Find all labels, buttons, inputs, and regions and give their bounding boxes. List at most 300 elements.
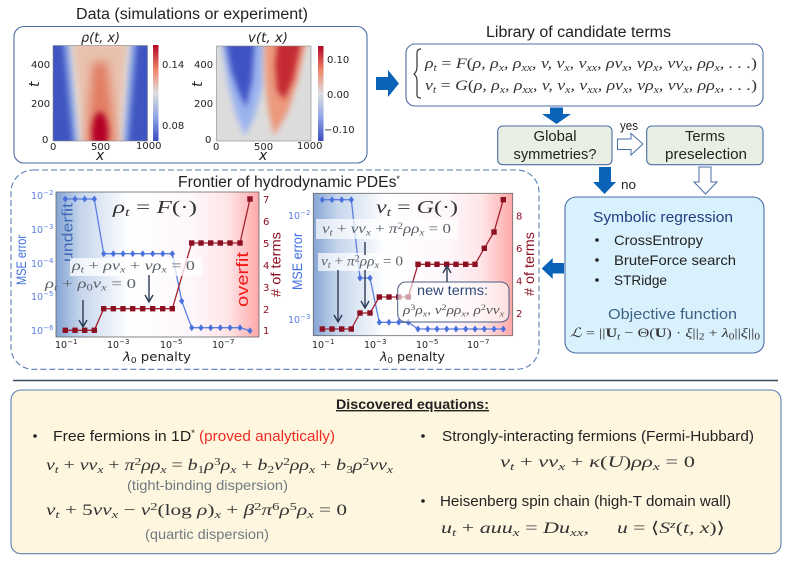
box: global symmetries: symmetries? — [514, 147, 596, 163]
x ticks: 10 — [212, 340, 224, 351]
equation: rho_t: , v, v — [532, 56, 565, 72]
arrow: no — [593, 167, 616, 194]
objective equation: ξ|| — [741, 325, 753, 340]
equation: rho_t: ) — [751, 56, 757, 72]
equation: v_t: , ρ — [505, 78, 522, 94]
equation: rho_t: , ρ — [504, 56, 522, 72]
title: F: t — [125, 205, 131, 219]
equation: v_t: , vρ — [628, 78, 654, 94]
equation: tight-binding: x — [308, 464, 315, 476]
equation: quartic: 2 — [254, 501, 262, 513]
equation: quartic: ρ — [278, 502, 290, 519]
equation: quartic: x — [110, 509, 118, 521]
callout: new terms: ρρ — [446, 302, 461, 317]
panel: library of candidate terms — [406, 44, 763, 106]
equation label: v linear: ρρ — [359, 254, 375, 269]
equation: tight-binding: + — [59, 457, 80, 474]
equation: rho_t: , v — [570, 56, 587, 72]
caption: quartic: (quartic dispersion) — [145, 526, 269, 542]
equation: quartic: (log — [158, 502, 197, 519]
equation: tight-binding: t — [55, 464, 60, 476]
axis labels: rho heatmap: 0.14 — [162, 60, 184, 71]
equation label: v full: t — [330, 228, 333, 238]
right axis ticks: 5 — [263, 239, 269, 250]
heatmap: v — [216, 38, 311, 141]
equation: tight-binding: + — [236, 457, 258, 474]
title: G: G(·) — [417, 197, 452, 217]
left axis ticks: −6 — [43, 324, 54, 332]
equation: v_t: x — [714, 85, 721, 96]
callout: new terms: x — [498, 308, 504, 318]
equation: v_t: = — [436, 78, 455, 94]
right axis ticks — [263, 195, 269, 337]
equation label: v linear: π — [347, 254, 354, 269]
callout: new terms: , v — [427, 302, 442, 317]
axis labels: rho heatmap: 200 — [31, 99, 50, 110]
equation: quartic: β — [244, 502, 252, 519]
x axis title: 0 — [131, 356, 137, 365]
equation: tight-binding: x — [96, 464, 104, 476]
equation: Fermi-Hubbard: = 0 — [660, 454, 695, 471]
equation: Heisenberg: t, x )⟩ — [683, 520, 721, 537]
blue line — [65, 199, 250, 331]
right axis ticks: 4 — [516, 276, 522, 288]
heatmap: rho — [52, 45, 148, 142]
equation label: rho linear: v — [93, 276, 101, 291]
left axis ticks: −5 — [43, 290, 53, 298]
equation: v_t: x — [622, 85, 629, 96]
equation: quartic: x — [306, 509, 314, 521]
equation: Heisenberg: x — [511, 527, 520, 539]
equation: rho_t: x — [652, 63, 659, 74]
equation: tight-binding: b — [188, 457, 196, 474]
equation label: rho linear: ρ — [77, 276, 84, 291]
left axis ticks: −2 — [300, 209, 310, 217]
equation: tight-binding: vv — [80, 457, 94, 474]
x axis title: 0 — [388, 356, 393, 365]
title: G: t — [387, 205, 392, 219]
panel: symbolic regression — [565, 197, 764, 353]
equation: Fermi-Hubbard: v — [500, 454, 507, 471]
red line — [65, 199, 250, 330]
box: terms preselection — [647, 126, 763, 165]
equation: quartic: v — [141, 502, 148, 519]
equation: rho_t: t — [434, 63, 437, 74]
equation label: v linear: + — [331, 254, 347, 269]
heading: library: Library of candidate terms — [486, 24, 671, 41]
equation: rho_t: , ρρ — [689, 56, 715, 72]
equation: rho_t: ρ — [425, 56, 432, 72]
equation: Heisenberg: xx — [569, 527, 584, 539]
equation: rho_t: , ρv — [597, 56, 623, 72]
right axis ticks: 4 — [263, 261, 269, 272]
equation: tight-binding: 3 — [214, 456, 221, 468]
equation: Fermi-Hubbard: x — [651, 461, 660, 473]
label: no: no — [621, 178, 636, 192]
equation label: v full: x — [365, 228, 371, 238]
panel: symbolic regression: STRidge — [614, 272, 667, 288]
box: terms preselection: Terms — [685, 129, 725, 145]
x axis title: penalty — [137, 350, 191, 364]
left axis ticks: 10 — [31, 191, 43, 202]
panel: symbolic regression: Symbolic regression — [593, 210, 733, 226]
equation: quartic: 6 — [272, 501, 280, 513]
left axis ticks: −3 — [300, 313, 310, 321]
left axis ticks: 10 — [31, 259, 43, 270]
equation: quartic: ρ) — [197, 502, 213, 519]
axis labels: v heatmap: 0.00 — [327, 90, 349, 101]
blue line — [322, 200, 503, 329]
equation: quartic: ρ — [296, 502, 308, 519]
equation: rho_t: x — [682, 63, 689, 74]
title: F: = — [130, 197, 157, 217]
bullet: free fermions — [33, 428, 335, 445]
equation: v_t: x — [499, 85, 506, 96]
left axis ticks — [288, 209, 310, 326]
callout: new terms: 2 — [481, 302, 486, 312]
arrow: data to library — [376, 70, 399, 97]
axis labels: rho heatmap: 500 — [91, 142, 110, 153]
equation: tight-binding: ρρ — [140, 457, 161, 474]
right axis ticks: 3 — [263, 283, 269, 294]
equation: quartic: = 0 — [314, 502, 347, 519]
equation: v_t: ) — [751, 78, 757, 94]
x ticks: −3 — [376, 338, 386, 346]
panel: data — [14, 26, 367, 164]
equation: quartic: vv — [93, 502, 107, 519]
x ticks: −5 — [172, 338, 182, 346]
title: G: = — [391, 197, 417, 217]
equation label: v full: + — [371, 221, 389, 236]
objective equation: ℒ = || U — [570, 325, 615, 340]
left axis ticks: −2 — [43, 189, 53, 197]
right axis ticks: 6 — [516, 244, 522, 255]
arrow: pointer new terms — [443, 266, 451, 282]
equation: Heisenberg: t — [452, 527, 458, 539]
axis labels: v heatmap: 0.10 — [327, 55, 349, 66]
right axis ticks: 8 — [516, 212, 522, 222]
x ticks: 10 — [160, 340, 172, 351]
left axis ticks: 10 — [31, 326, 43, 337]
title: F: F(·) — [157, 197, 190, 217]
heading: data: Data (simulations or experiment) — [76, 6, 308, 23]
title: F: ρ — [113, 197, 122, 217]
axis labels: rho heatmap: 0 — [50, 142, 56, 153]
equation: rho_t: xx — [585, 63, 598, 74]
axis labels: rho heatmap: ρ(t, x) — [81, 30, 120, 46]
equation label: v full: v — [322, 221, 328, 236]
heading: frontier: Frontier of hydrodynamic PDEs — [178, 174, 393, 191]
caption: tight-binding: (tight-binding dispersion) — [127, 477, 288, 493]
equation label: v linear: = 0 — [379, 254, 403, 269]
x ticks: 10 — [467, 340, 479, 351]
objective equation: − Θ( — [620, 325, 655, 340]
equation: v_t: , . . . — [720, 78, 751, 94]
callout: new terms: ρ — [414, 302, 423, 317]
colorbar: v — [318, 46, 324, 141]
axis labels: rho heatmap: 0.08 — [162, 121, 184, 132]
equation: quartic: 5 — [290, 501, 298, 513]
equation label: v full: vv — [351, 221, 363, 236]
equation label: rho linear: t — [54, 282, 58, 292]
x ticks — [55, 338, 234, 351]
equation: quartic: 2 — [150, 501, 158, 513]
panel: symbolic regression: CrossEntropy — [614, 232, 703, 248]
equation: tight-binding: 2 — [283, 456, 290, 468]
callout: new terms — [398, 282, 509, 322]
equation: tight-binding: vv — [369, 457, 388, 474]
equation: Heisenberg: u — [441, 520, 449, 537]
equation: Heisenberg: ( — [676, 520, 683, 537]
equation: tight-binding: 2 — [135, 456, 141, 468]
equation label: rho convective: + — [84, 258, 103, 273]
equation: tight-binding: ρ — [203, 457, 214, 474]
x ticks: 10 — [55, 340, 67, 351]
right axis ticks: 2 — [263, 305, 269, 316]
equation label: v linear: 2 — [355, 254, 360, 264]
x ticks: 10 — [416, 340, 428, 351]
equation: Fermi-Hubbard: κ(U )ρρ — [589, 454, 647, 471]
bullet: free fermions: Free fermions in 1D — [53, 429, 180, 445]
equation: rho_t: , vρ — [628, 56, 653, 72]
equation: tight-binding: = — [167, 457, 188, 474]
objective equation: λ — [722, 325, 727, 340]
equation: rho_t: x — [498, 63, 505, 74]
heading: frontier: * — [396, 174, 400, 184]
x axis title: penalty — [393, 350, 445, 364]
panel: symbolic regression: Objective function — [608, 307, 737, 323]
equation: rho_t: x — [713, 63, 721, 74]
x ticks — [312, 338, 489, 351]
callout: new terms: x — [460, 308, 466, 318]
arrow: pointer full — [361, 242, 369, 308]
axis labels: v heatmap — [190, 30, 355, 164]
equation: tight-binding: 2 — [267, 464, 274, 476]
x axis title: λ — [379, 350, 388, 364]
x ticks: −3 — [119, 338, 129, 346]
equation: v_t: , v, v — [533, 78, 566, 94]
equation label: rho convective: + — [125, 258, 145, 273]
axis labels: v heatmap: 500 — [254, 142, 273, 153]
axis labels: v heatmap: 0 — [205, 135, 211, 146]
equation: Heisenberg: = — [520, 520, 543, 537]
objective equation: 0 — [754, 332, 761, 342]
equation: Fermi-Hubbard: x — [557, 461, 565, 473]
left axis ticks — [31, 189, 54, 337]
equation label: v full: π — [389, 221, 396, 236]
equation: quartic: x — [213, 509, 221, 521]
colorbar: rho — [153, 45, 158, 141]
left axis title: MSE error — [13, 235, 29, 285]
axis labels: rho heatmap: 400 — [31, 60, 50, 71]
equation: rho_t: = — [437, 56, 456, 72]
equation: v_t: G(ρ, ρ — [455, 78, 496, 94]
equation: quartic: + — [221, 502, 244, 519]
brace — [414, 49, 421, 98]
equation: v_t: , ρρ — [689, 78, 715, 94]
axis labels: v heatmap: x — [258, 148, 268, 164]
equation: tight-binding: x — [159, 464, 167, 476]
equation label: v full: + — [333, 221, 351, 236]
equation label: v linear: v — [321, 254, 327, 269]
equation: quartic: + 5 — [60, 502, 93, 519]
callout: new terms: , ρ — [466, 302, 481, 317]
x ticks: 10 — [107, 340, 119, 351]
objective equation: t — [617, 332, 621, 342]
right axis title: # of terms — [521, 232, 537, 296]
equation: Heisenberg — [441, 519, 725, 539]
equation: tight-binding: π — [125, 457, 133, 474]
equation: tight-binding: 1 — [198, 464, 204, 476]
axis labels: v heatmap: 0 — [213, 142, 219, 153]
equation label: v full: x — [418, 228, 424, 238]
equation: v_t: , vv — [659, 78, 684, 94]
axis labels: v heatmap: 400 — [194, 60, 213, 71]
axis labels: rho heatmap: 0 — [42, 135, 48, 146]
equation: v_t: , v — [570, 78, 588, 94]
axis labels: rho heatmap — [27, 30, 184, 164]
equation: tight-binding: v — [274, 457, 284, 474]
right axis ticks: 2 — [516, 309, 522, 320]
left axis title: MSE error — [289, 233, 305, 290]
bullet: Heisenberg: Heisenberg spin chain (high-T domain wall) — [440, 494, 731, 510]
x ticks: −1 — [324, 338, 334, 346]
right axis ticks: 1 — [263, 326, 269, 337]
heading: discovered equations: Discovered equations: — [336, 396, 489, 412]
left axis ticks: −4 — [43, 257, 54, 265]
equation: v_t: x — [652, 85, 660, 96]
equation: quartic: t — [55, 509, 61, 521]
objective equation: + — [704, 325, 722, 340]
equation: tight-binding: 3 — [346, 464, 354, 476]
red line — [322, 200, 503, 329]
x ticks: −7 — [479, 338, 489, 346]
equation: Heisenberg: auu — [480, 520, 504, 537]
equation label: v full — [316, 219, 458, 239]
label: overfit: overfit — [233, 252, 252, 307]
equation label: rho convective: t — [81, 264, 85, 274]
equation label: v linear — [318, 253, 408, 271]
equation label: rho convective: ρv — [103, 258, 116, 273]
left axis ticks: 10 — [288, 211, 300, 222]
equation: v_t: , ρv — [598, 78, 623, 94]
equation: rho_t: x — [563, 63, 570, 74]
axis labels: v heatmap: v(t, x) — [248, 30, 288, 46]
equation: tight-binding: v — [46, 457, 53, 474]
equation label: rho convective: vρ — [145, 258, 157, 273]
equation: Fermi-Hubbard: + — [514, 454, 538, 471]
equation: Heisenberg: , — [583, 520, 589, 537]
box: terms preselection: preselection — [665, 147, 747, 163]
right axis ticks: 6 — [263, 217, 269, 228]
equation: tight-binding: x — [386, 464, 393, 476]
x ticks: −7 — [224, 338, 234, 346]
equation label: v linear: t — [328, 260, 331, 270]
equation label: v full: 2 — [397, 221, 403, 231]
axis labels: rho heatmap: x — [95, 148, 105, 164]
axis labels: v heatmap: 1000 — [297, 141, 322, 152]
left axis ticks: 10 — [288, 315, 300, 326]
x ticks: −1 — [67, 338, 77, 346]
arrow: regression to frontier — [542, 258, 564, 279]
equation: tight-binding: ρ — [220, 457, 231, 474]
equation label: rho convective: x — [160, 264, 167, 274]
axis labels: v heatmap: −0.10 — [324, 125, 355, 136]
equation: v_t: v — [425, 78, 432, 94]
chart: rho frontier — [13, 189, 284, 365]
equation: Fermi-Hubbard: vv — [538, 454, 552, 471]
equation: quartic: π — [262, 502, 273, 519]
equation: Heisenberg: + — [456, 520, 480, 537]
x axis title: λ — [122, 350, 131, 364]
equation: tight-binding: ρρ — [289, 457, 309, 474]
axis labels: rho heatmap: t — [27, 81, 43, 87]
equation: v_t: xx — [586, 85, 598, 96]
bullet: strongly interacting: Strongly-interacting fermions (Fermi-Hubbard) — [442, 429, 754, 445]
equation: rho_t: xx — [520, 63, 533, 74]
objective equation: || — [734, 325, 741, 340]
title: G: v — [376, 197, 384, 217]
equation label: rho convective: x — [119, 264, 125, 274]
objective equation: 2 — [699, 332, 704, 342]
x ticks: 10 — [364, 340, 376, 351]
arrow: pointer linear — [334, 270, 342, 322]
arrow: pointer 2 — [79, 300, 87, 327]
equation: tight-binding: + — [103, 457, 125, 474]
equation label: rho convective: ρ — [72, 258, 78, 273]
callout: new terms: x — [422, 308, 427, 318]
callout: new terms: 2 — [442, 302, 447, 312]
arrow: yes — [618, 134, 643, 155]
equation: tight-binding: x — [229, 464, 237, 476]
callout: new terms: 3 — [410, 302, 415, 312]
equation: tight-binding: b — [258, 457, 266, 474]
box: global symmetries: Global — [534, 129, 576, 145]
equation: tight-binding: b — [336, 457, 344, 474]
equation: tight-binding: 2 — [362, 456, 369, 468]
bullet: free fermions: (proved analytically) — [199, 429, 335, 445]
callout: new terms: ρ — [403, 302, 409, 317]
equation: tight-binding: + — [315, 457, 336, 474]
panel: discovered equations — [11, 390, 781, 554]
equation label: rho linear: x — [100, 282, 107, 292]
equation: quartic: − — [118, 502, 141, 519]
callout: new terms: vv — [486, 302, 500, 317]
x ticks: 10 — [312, 340, 324, 351]
equation: tight-binding: ρ — [352, 457, 363, 474]
arrow: preselection to regression — [694, 167, 717, 194]
equation: Heisenberg: z — [669, 519, 677, 531]
equation: Heisenberg: Du — [543, 520, 563, 537]
equation label: rho linear: = 0 — [107, 276, 136, 291]
callout: new terms: new terms: — [417, 283, 488, 298]
objective equation: U) · ξ|| — [655, 325, 698, 340]
right axis title: # of terms — [268, 232, 284, 297]
label: underfit: underfit — [60, 202, 76, 262]
bullet: free fermions: * — [191, 428, 196, 438]
panel: symbolic regression: BruteForce search — [614, 252, 736, 268]
right axis ticks — [516, 212, 522, 320]
equation label: rho convective — [70, 258, 202, 276]
equation: Fermi-Hubbard: t — [510, 461, 516, 473]
equation label: rho linear: ρ — [45, 276, 51, 291]
equation: Heisenberg: u = ⟨ S — [617, 520, 667, 537]
left axis ticks: −3 — [43, 223, 53, 231]
equation label: v full: = 0 — [424, 221, 451, 236]
equation: quartic: v — [46, 502, 53, 519]
arrow: pointer 1 — [145, 275, 153, 302]
equation label: v full: ρρ — [402, 221, 420, 236]
